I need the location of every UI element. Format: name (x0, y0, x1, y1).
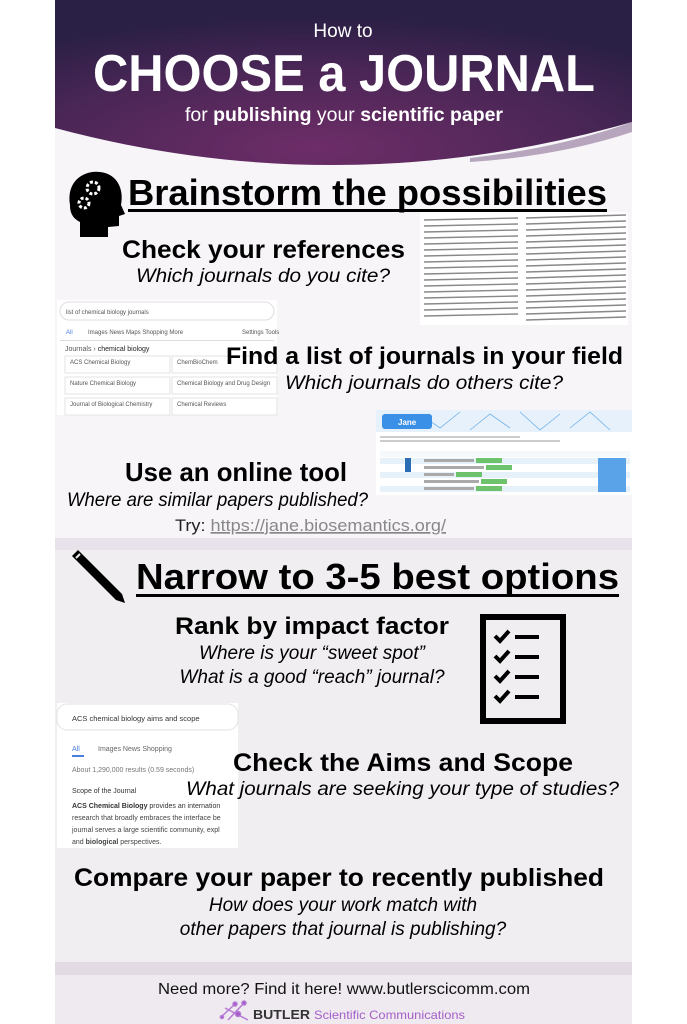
text: check your references: Check your references (122, 236, 405, 264)
image: aims and scope search: and biological perspectives. (72, 839, 162, 846)
footer (55, 962, 632, 1024)
text: aims and scope (186, 749, 619, 800)
logo: BUTLER (253, 1007, 311, 1022)
text: online tool: Try: https://jane.biosemantics.org/ (175, 516, 446, 535)
text: check your references (122, 236, 405, 287)
header: how to: How to (313, 21, 373, 42)
logo: Scientific Communications (314, 1008, 465, 1022)
image: aims and scope search: research that broadly embraces the interface be (72, 815, 221, 822)
text: check your references: Which journals do you cite? (136, 266, 390, 287)
image: jane tool (376, 410, 632, 495)
header: title: CHOOSE a JOURNAL (93, 45, 595, 103)
image: reference list (420, 212, 628, 325)
icon: pencil (72, 550, 125, 603)
icon: head with gears (69, 172, 125, 237)
text: rank by impact factor: Where is your “sweet spot” (199, 643, 427, 664)
image: google search journals: Journal of Biological Chemistry (70, 402, 152, 408)
image: aims and scope search: Images News Shopping (98, 746, 172, 753)
text: rank by impact factor (175, 613, 449, 688)
text: rank by impact factor: Rank by impact factor (175, 613, 449, 640)
image: google search journals: Chemical Reviews (177, 402, 226, 408)
header: subtitle: for publishing your scientific paper (185, 105, 504, 126)
text: online tool: Use an online tool (125, 457, 347, 487)
text: find a list: Find a list of journals in your field (226, 343, 623, 370)
image: google search journals: Journals › chemical biology (65, 346, 150, 353)
image: google search journals: list of chemical biology journals (66, 310, 149, 316)
text: compare (74, 864, 604, 940)
logo (220, 1001, 465, 1022)
heading: narrow: Narrow to 3-5 best options (136, 556, 619, 597)
text: compare: Compare your paper to recently published (74, 864, 604, 892)
image: google search journals: ACS Chemical Biology (70, 360, 130, 366)
image: google search journals: Chemical Biology and Drug Design (177, 381, 270, 387)
image: google search journals: Settings Tools (242, 330, 279, 336)
image: aims and scope search: All (72, 746, 80, 753)
image: aims and scope search: ACS Chemical Biology provides an internation (72, 803, 220, 810)
text: compare: other papers that journal is publishing? (180, 919, 507, 940)
image: aims and scope search (57, 703, 238, 848)
section 2 background (55, 540, 632, 962)
text: aims and scope: Check the Aims and Scope (233, 749, 573, 777)
image: aims and scope search: About 1,290,000 results (0.59 seconds) (72, 767, 194, 774)
image: aims and scope search: Scope of the Journal (72, 788, 137, 795)
text: online tool (67, 457, 446, 535)
icon: checklist (483, 617, 563, 721)
footer: Need more? Find it here! www.butlerscicomm.com (158, 981, 530, 998)
image: google search journals: All (66, 330, 73, 336)
image: google search journals: ChemBioChem (177, 360, 218, 366)
text: rank by impact factor: What is a good “reach” journal? (179, 667, 445, 688)
header banner (55, 0, 632, 165)
text: find a list (226, 343, 623, 394)
heading: brainstorm: Brainstorm the possibilities (128, 172, 607, 213)
image: aims and scope search: journal serves a large scientific community, expl (71, 827, 220, 834)
text: aims and scope: What journals are seeking your type of studies? (186, 779, 619, 800)
image: google search journals: Nature Chemical Biology (70, 381, 136, 387)
text: compare: How does your work match with (209, 895, 477, 916)
text: online tool: Where are similar papers published? (67, 490, 368, 511)
image: jane tool: Jane (398, 418, 417, 427)
image: google search journals (57, 300, 279, 415)
section 1 background (55, 0, 632, 540)
image: google search journals: Images News Maps Shopping More (88, 330, 184, 336)
image: aims and scope search: ACS chemical biology aims and scope (72, 714, 200, 723)
text: find a list: Which journals do others cite? (285, 373, 563, 394)
